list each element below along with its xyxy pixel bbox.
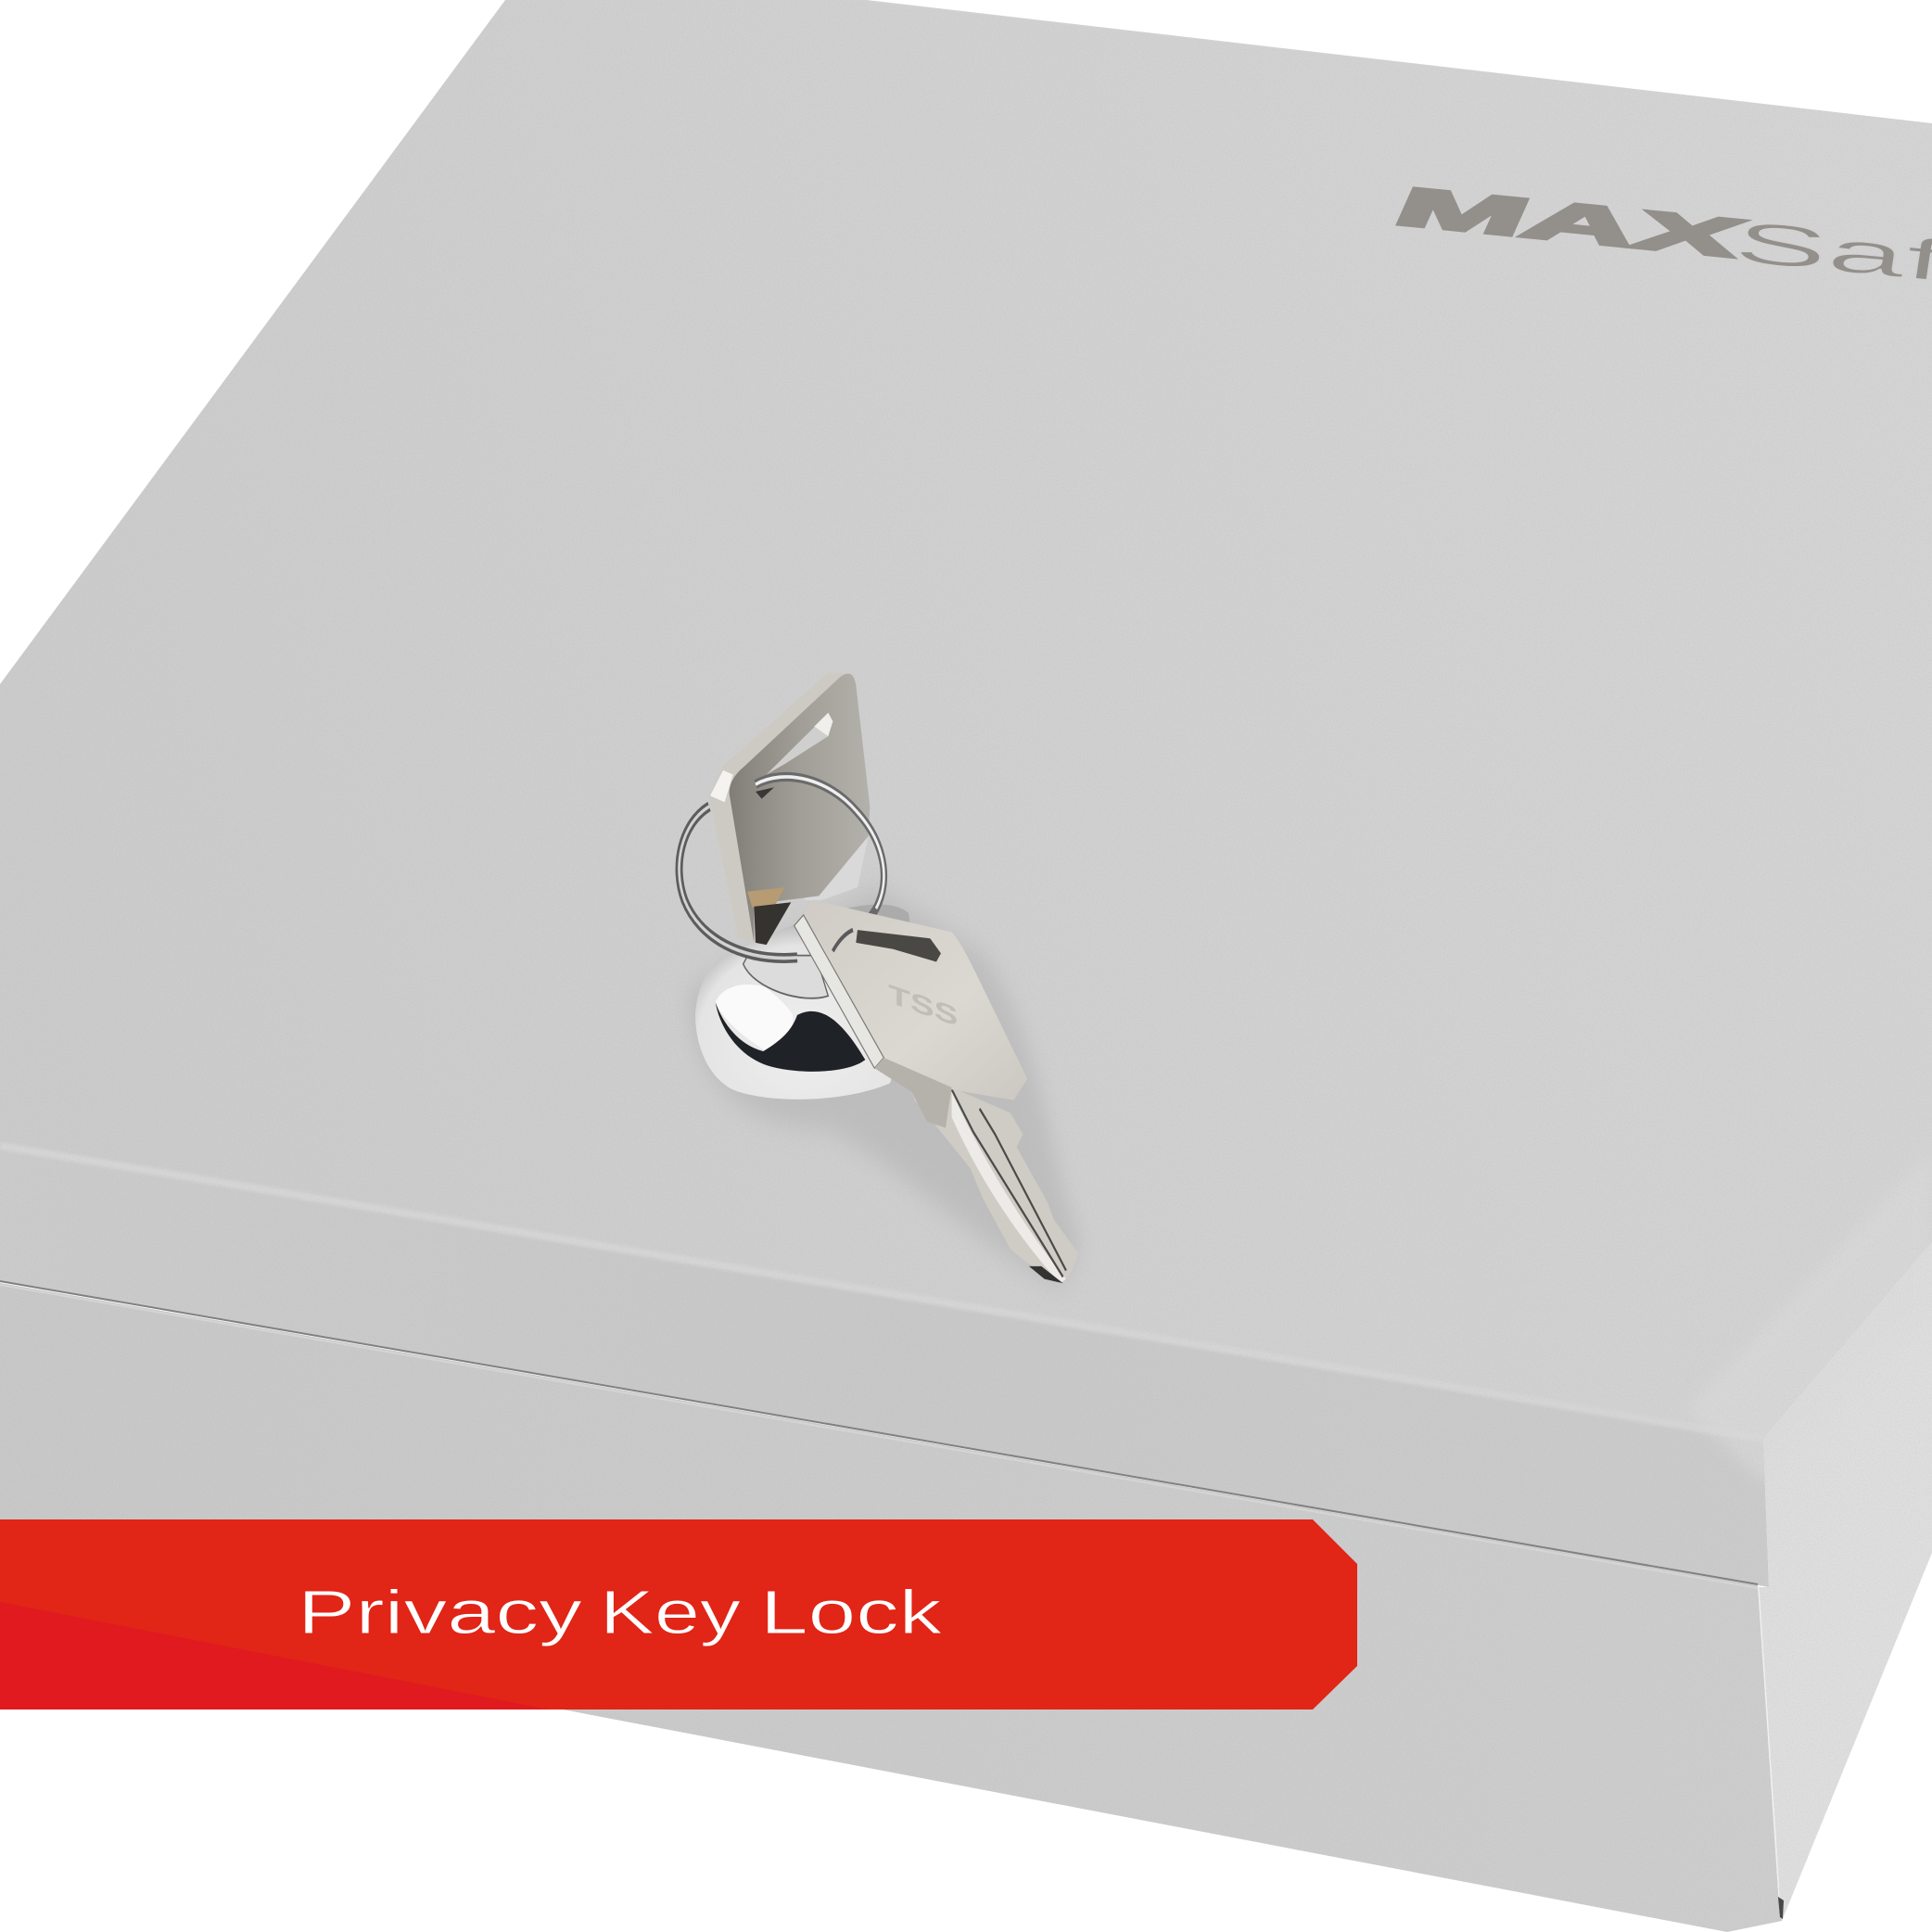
key blade <box>911 1087 1078 1283</box>
back key tag <box>709 672 870 945</box>
dome body <box>695 905 910 1099</box>
front key <box>794 900 1078 1283</box>
body front face <box>0 1283 1782 1932</box>
ring end over key <box>833 930 853 951</box>
banner shape <box>0 1519 1357 1710</box>
banner label: Key <box>600 1578 742 1647</box>
key blade groove <box>952 1092 1066 1283</box>
logo word Safe: Safe <box>1730 209 1932 301</box>
lock cylinder neck <box>744 956 828 998</box>
box top face <box>0 0 1932 1439</box>
bottom corner notch <box>1778 1897 1784 1919</box>
key blade groove shadow <box>952 1089 1066 1277</box>
banner label: Privacy <box>298 1578 583 1647</box>
ring highlight <box>756 777 883 909</box>
key lower edge <box>874 1058 952 1128</box>
lid top edge highlight <box>0 1146 1763 1439</box>
key slot <box>856 930 941 962</box>
chrome lock dome <box>695 905 910 1099</box>
banner label: Lock <box>760 1578 943 1647</box>
key head thick edge <box>794 915 883 1068</box>
tag lower dark notch <box>754 902 791 945</box>
tag ring hole <box>756 787 774 799</box>
body corner line <box>1759 1589 1780 1910</box>
red banner <box>0 1519 1357 1710</box>
dome dark reflection <box>716 1002 865 1072</box>
key stamped code: TSS <box>888 979 958 1033</box>
tag face <box>730 674 870 943</box>
back of key ring <box>680 807 797 958</box>
tag brass reflection <box>747 887 785 908</box>
tag translucent lower part <box>804 836 869 900</box>
key blade tip <box>1029 1266 1063 1283</box>
lid seam line <box>0 1281 1758 1584</box>
lid front face <box>0 1146 1769 1587</box>
soft shadow of key and lock <box>689 887 1082 1288</box>
logo word MAX: MAX <box>1385 178 1752 268</box>
dome bright reflection <box>716 985 793 1051</box>
seam light line <box>0 1285 1758 1588</box>
back ring highlight <box>680 807 797 958</box>
key lock assembly <box>680 672 1082 1288</box>
tag thick edge <box>709 672 853 943</box>
tag slot bright end <box>814 713 833 736</box>
corner light blend <box>1687 1150 1932 1483</box>
tag slot <box>767 713 833 774</box>
split key ring <box>756 777 883 934</box>
key head <box>804 900 1027 1100</box>
tag bright corner <box>710 770 733 802</box>
brand logo <box>1385 178 1932 301</box>
box right side face <box>1759 1242 1932 1921</box>
banner darker corner <box>0 1602 549 1710</box>
